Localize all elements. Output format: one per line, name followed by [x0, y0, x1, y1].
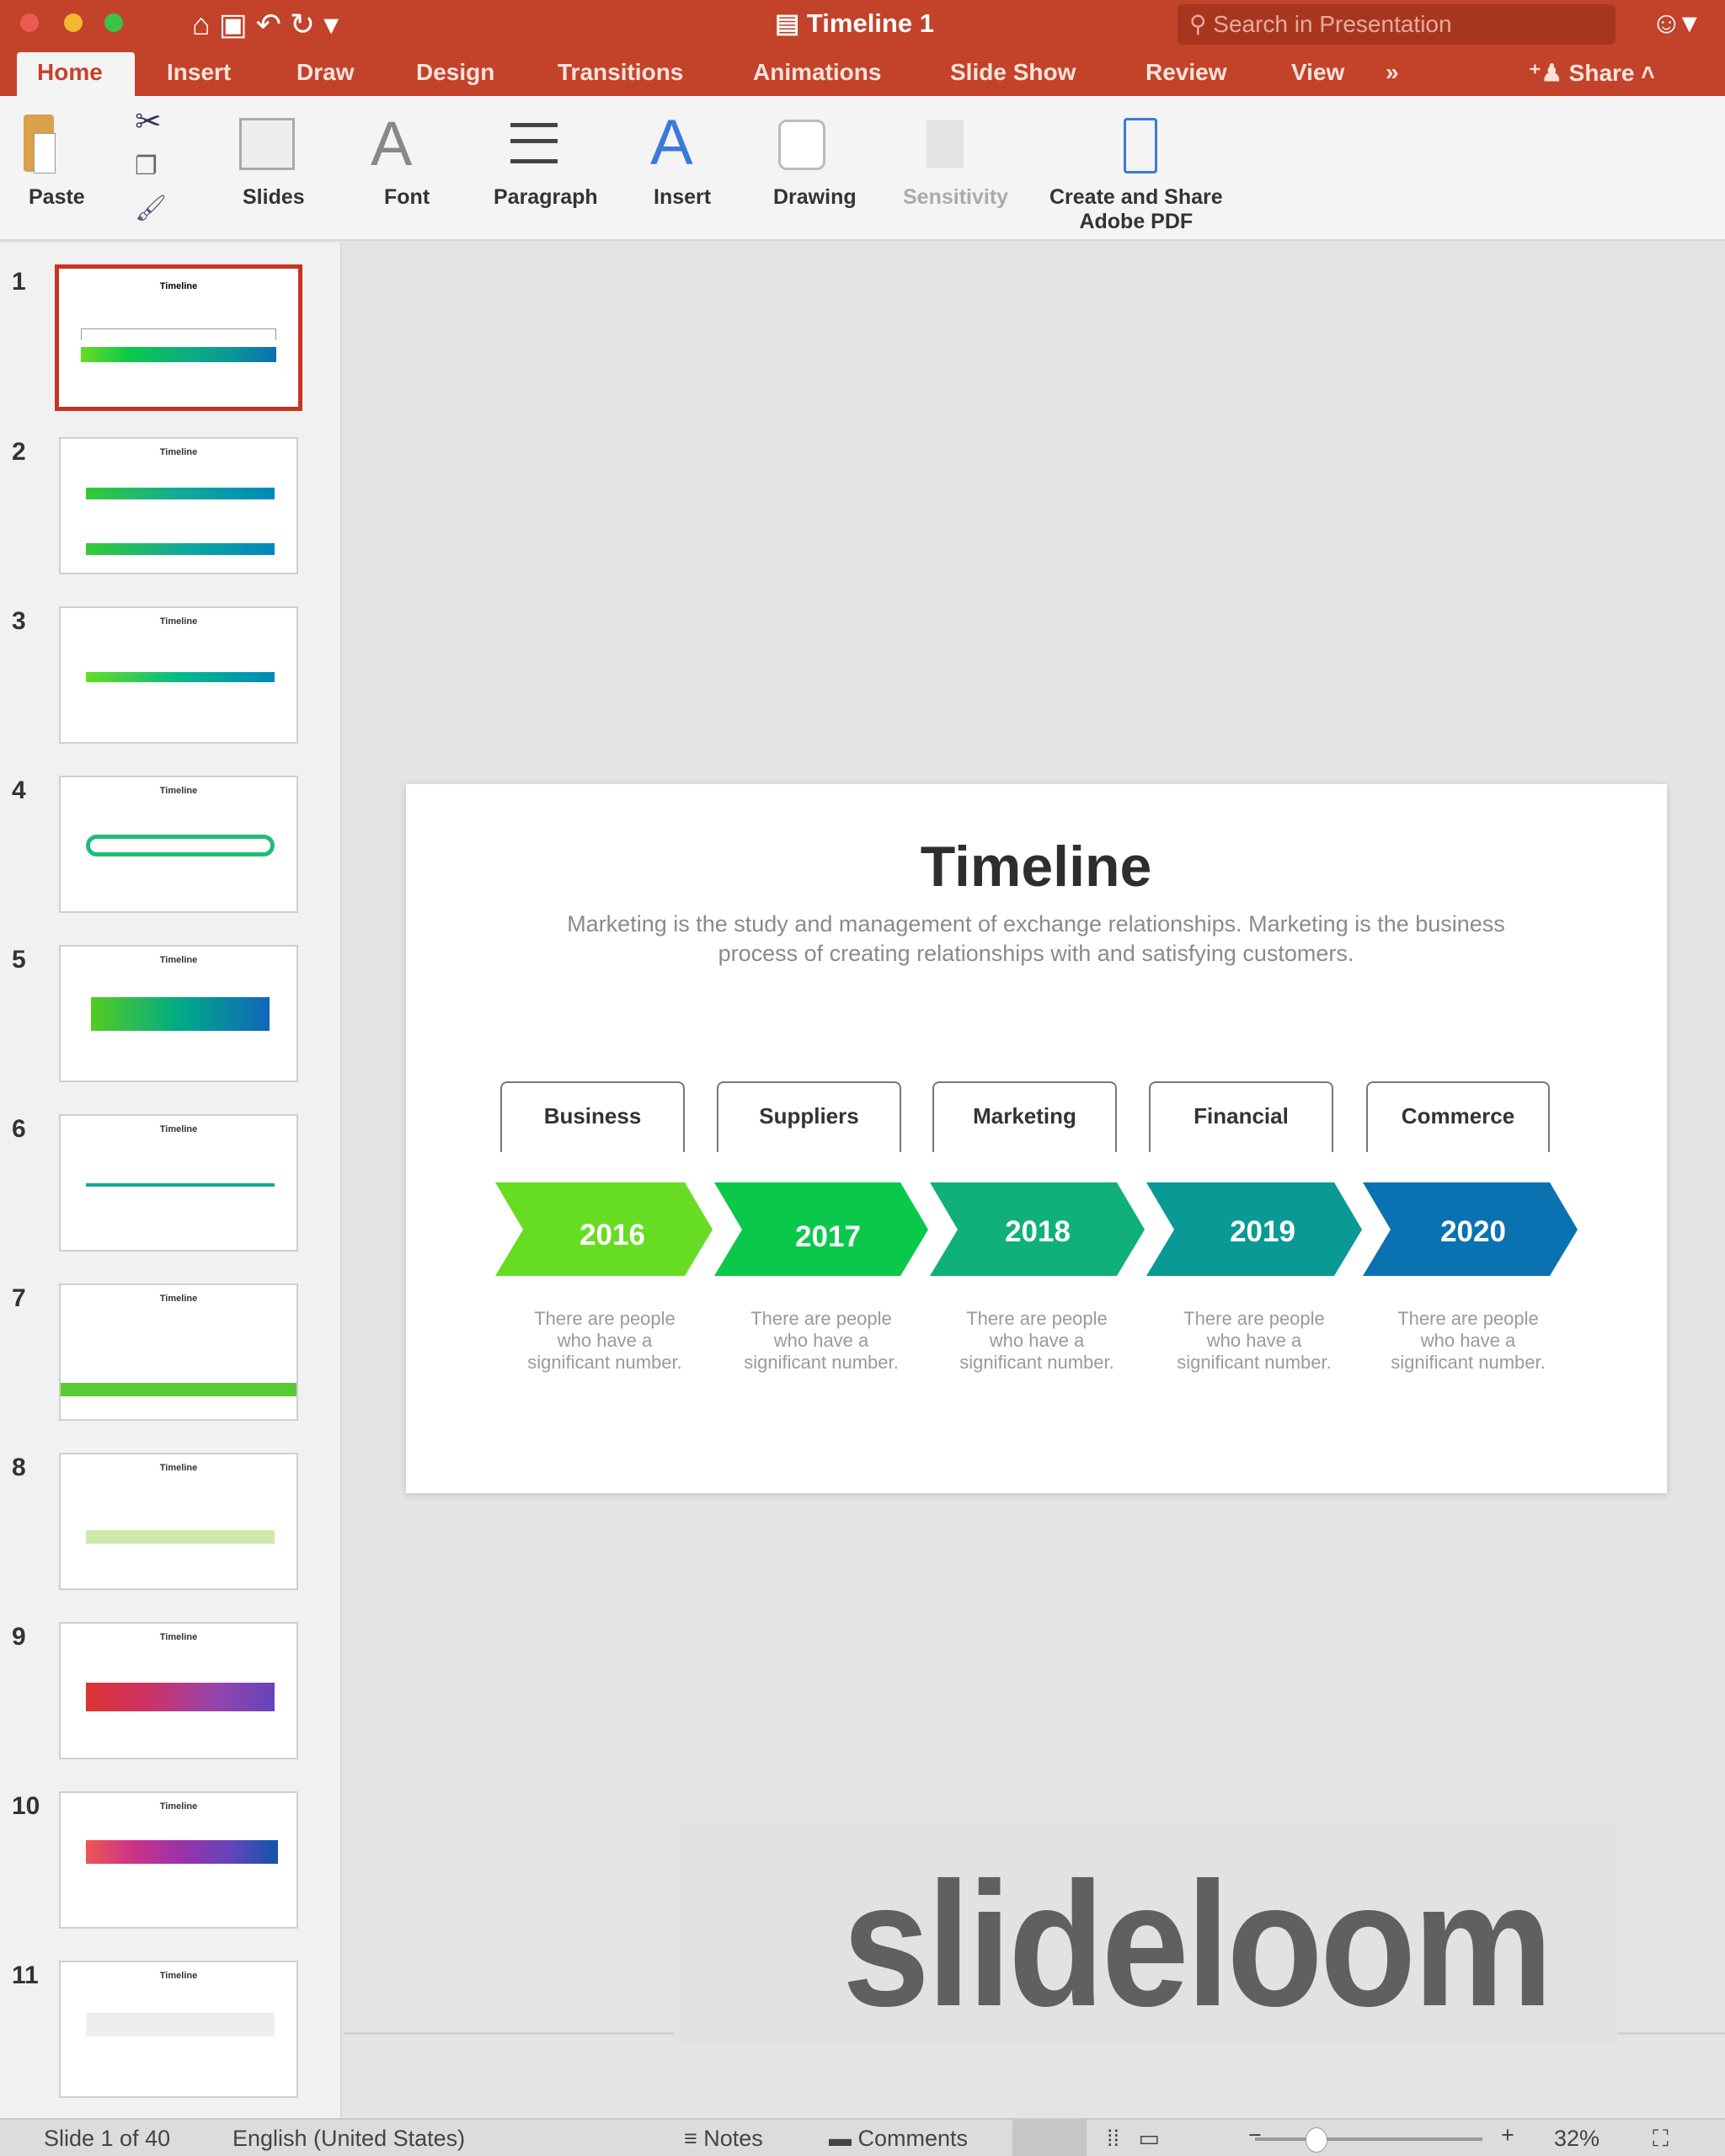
text: − [1248, 2122, 1262, 2148]
icon: insert: A [650, 107, 693, 179]
text: Timeline [160, 1294, 197, 1304]
smiley icon: ☺▾ [1651, 5, 1697, 40]
ribbon: Paragraph [494, 185, 598, 209]
descriptions: who have a [558, 1330, 652, 1351]
notes divider [344, 2032, 1725, 2035]
text: Timeline [160, 1632, 197, 1642]
icon: paste [24, 115, 54, 172]
ribbon [0, 96, 1725, 241]
ribbon: Drawing [773, 185, 857, 209]
text: Timeline [160, 281, 197, 291]
sidebar: slide thumbnails [0, 243, 342, 2118]
text: ⁞⁞ ▭ [1107, 2126, 1160, 2151]
descriptions: There are people [534, 1308, 676, 1329]
descriptions: who have a [774, 1330, 868, 1351]
watermark panel [674, 1823, 1617, 2044]
text: Timeline [160, 616, 197, 627]
descriptions: There are people [966, 1308, 1108, 1329]
ribbon: 🖌 [135, 195, 167, 222]
text: 7 [12, 1284, 26, 1312]
category boxes: Commerce [1402, 1103, 1514, 1129]
chevron timeline: 2016 [579, 1219, 645, 1251]
document title: ▤ Timeline 1 [775, 8, 934, 38]
text: English (United States) [232, 2126, 465, 2151]
icon: drawing [778, 120, 825, 170]
ribbon: Slides [243, 185, 305, 209]
descriptions: significant number. [527, 1352, 682, 1373]
text: Timeline [160, 1463, 197, 1473]
ribbon: ❐ [135, 152, 158, 180]
text: Timeline [160, 1801, 197, 1812]
text: 11 [12, 1961, 39, 1989]
descriptions: who have a [990, 1330, 1084, 1351]
text: 10 [12, 1792, 40, 1820]
descriptions: significant number. [959, 1352, 1114, 1373]
subtitle [567, 911, 1505, 966]
chevron timeline: 2017 [795, 1220, 861, 1253]
descriptions: There are people [1397, 1308, 1539, 1329]
descriptions: There are people [1183, 1308, 1325, 1329]
title bar: » [1386, 59, 1399, 85]
text: ▬ Comments [829, 2126, 968, 2151]
text: 3 [12, 607, 26, 635]
descriptions: who have a [1421, 1330, 1515, 1351]
search box: ⚲ Search in Presentation [1189, 11, 1452, 37]
icon: slides [239, 118, 295, 170]
text: Timeline [160, 1971, 197, 1981]
ribbon: Create and Share [1049, 185, 1223, 209]
text: 9 [12, 1623, 26, 1651]
text: Timeline [160, 955, 197, 965]
ribbon: Insert [654, 185, 711, 209]
chevron timeline [495, 1182, 1578, 1276]
text: 4 [12, 776, 26, 804]
text: ≡ Notes [684, 2126, 763, 2151]
title bar: ⁺♟ Share ˄ [1529, 60, 1655, 86]
subtitle: process of creating relationships with and satisfying customers. [718, 941, 1354, 966]
tabs [17, 52, 135, 96]
text: + [1501, 2122, 1514, 2148]
title bar: View [1291, 59, 1344, 85]
title bar: Animations [753, 59, 881, 85]
descriptions: There are people [750, 1308, 892, 1329]
search box [1178, 4, 1616, 45]
category boxes: Business [544, 1103, 641, 1129]
title bar [0, 0, 1725, 96]
ribbon: Adobe PDF [1079, 210, 1193, 233]
chevron timeline: 2019 [1230, 1215, 1295, 1248]
title bar: Home [37, 59, 103, 85]
heading: Timeline: Timeline [921, 835, 1151, 899]
title bar: Transitions [558, 59, 683, 85]
ribbon: Paste [29, 185, 85, 209]
category boxes: Suppliers [759, 1103, 859, 1129]
category boxes: Marketing [973, 1103, 1076, 1129]
ribbon: ✂ [135, 104, 162, 140]
descriptions [527, 1308, 1546, 1373]
text: 6 [12, 1115, 26, 1143]
icon: font: A [371, 109, 412, 179]
icon: sensitivity [927, 120, 964, 168]
subtitle: Marketing is the study and management of exchange relationships. Marketing is the business [567, 911, 1505, 937]
category boxes [500, 1081, 1550, 1152]
quick access icons: ⌂ ▣ ↶ ↻ ▾ [192, 7, 339, 41]
text: Timeline [160, 786, 197, 796]
text: 1 [12, 268, 26, 296]
ribbon: Sensitivity [903, 185, 1008, 209]
title bar: Review [1146, 59, 1226, 85]
ribbon: Font [384, 185, 430, 209]
icon: paragraph [510, 123, 558, 163]
text: 32% [1554, 2126, 1599, 2151]
text: Slide 1 of 40 [44, 2126, 170, 2151]
descriptions: significant number. [1391, 1352, 1546, 1373]
category boxes: Financial [1194, 1103, 1289, 1129]
chevron timeline: 2020 [1440, 1215, 1506, 1248]
descriptions: significant number. [1177, 1352, 1332, 1373]
text: 8 [12, 1454, 26, 1481]
text: 2 [12, 438, 26, 466]
slide [406, 784, 1667, 1493]
text: Timeline [160, 447, 197, 457]
text: Timeline [160, 1124, 197, 1134]
text: 5 [12, 946, 26, 974]
descriptions: significant number. [744, 1352, 899, 1373]
text: ⛶ [1653, 2126, 1669, 2151]
window buttons [20, 13, 39, 32]
chevron timeline: 2018 [1005, 1215, 1071, 1248]
title bar: Insert [167, 59, 231, 85]
status bar [0, 2118, 1725, 2156]
descriptions: who have a [1207, 1330, 1301, 1351]
title bar: Draw [296, 59, 354, 85]
icon: pdf [1124, 118, 1157, 173]
title bar: Slide Show [950, 59, 1076, 85]
title bar: Design [416, 59, 494, 85]
